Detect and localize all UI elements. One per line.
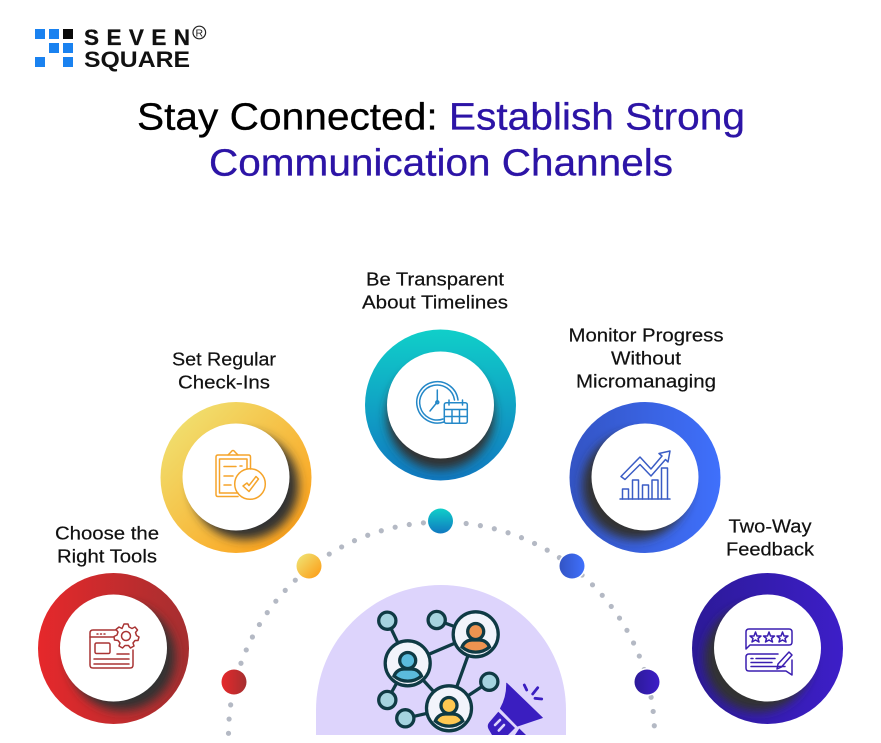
- dotted arc connector: [228, 522, 654, 735]
- central network illustration: [379, 611, 498, 731]
- label: Micromanaging: [576, 370, 716, 392]
- icon: rating and review bubbles: [746, 629, 792, 675]
- label: [172, 348, 276, 392]
- node dots on arc: [220, 507, 661, 696]
- panel: Two-Way Feedback: [692, 516, 843, 724]
- icon: clipboard with check: [216, 450, 265, 499]
- label: Two-Way: [728, 516, 812, 536]
- logo: Seven Square: SEVEN: [84, 25, 190, 50]
- person: orange: [453, 612, 498, 657]
- label: Check-Ins: [178, 372, 270, 392]
- logo: Seven Square: R: [196, 27, 204, 39]
- label: [726, 516, 815, 560]
- icon: clock and calendar: [417, 382, 467, 423]
- logo: Seven Square: SQUARE: [84, 47, 190, 72]
- label: Be Transparent: [366, 268, 504, 290]
- icon: megaphone: [488, 683, 542, 735]
- panel: Monitor Progress Without Micromanaging: [568, 324, 724, 553]
- panel: Set Regular Check-Ins: [160, 348, 312, 553]
- title: Stay Connected: Establish Strong: [137, 96, 745, 138]
- title: Communication Channels: [209, 142, 673, 184]
- logo: Seven Square: [35, 25, 206, 72]
- label: Set Regular: [172, 348, 276, 370]
- label: [55, 522, 159, 566]
- label: Right Tools: [57, 546, 157, 566]
- label: Choose the: [55, 522, 159, 544]
- icon: growth chart: [620, 451, 670, 499]
- icon: browser with gear: [90, 624, 139, 668]
- panel: Be Transparent About Timelines: [362, 268, 516, 480]
- central purple semicircle: [316, 585, 566, 735]
- label: [362, 268, 508, 312]
- label: Monitor Progress: [568, 324, 724, 346]
- label: Feedback: [726, 538, 815, 560]
- person: yellow: [426, 686, 472, 731]
- label: [568, 324, 724, 392]
- label: About Timelines: [362, 292, 508, 312]
- label: Without: [611, 348, 681, 368]
- panel: Choose the Right Tools: [38, 522, 189, 724]
- person: blue: [385, 641, 430, 686]
- title: [137, 96, 745, 184]
